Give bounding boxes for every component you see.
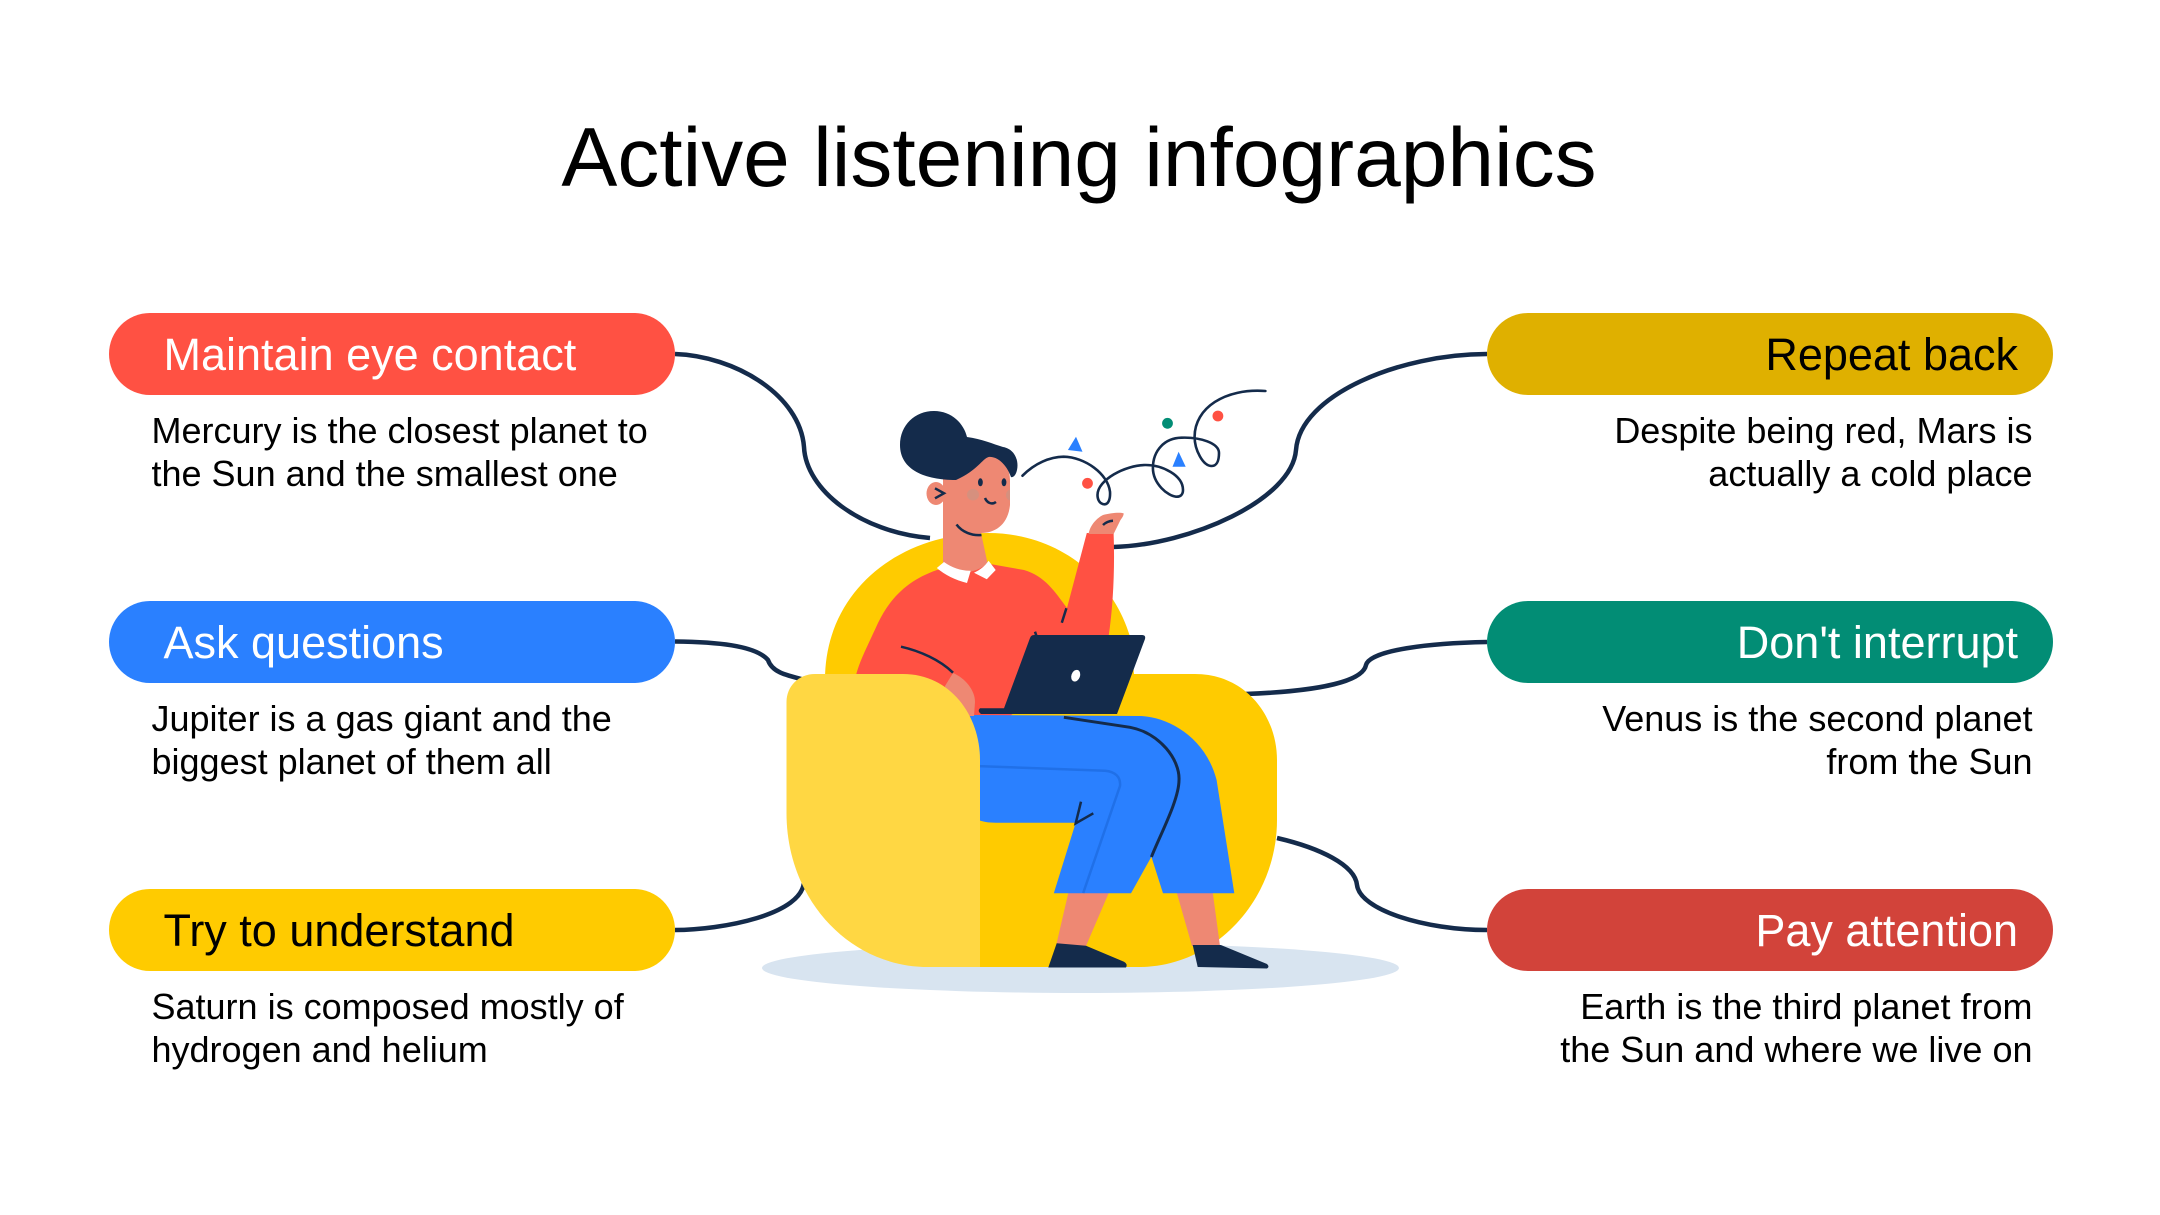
description	[152, 986, 624, 1070]
pill heading	[1486, 889, 2052, 971]
sweater lines	[1035, 608, 1066, 637]
panel: try to understand	[109, 889, 675, 1070]
description: Despite being red, Mars is	[1614, 410, 2032, 451]
title: Active listening infographics	[561, 110, 1597, 204]
description	[1614, 410, 2032, 494]
legs	[1056, 890, 1110, 946]
neck and face	[943, 456, 1010, 572]
floor shadow	[762, 943, 1399, 993]
description	[152, 698, 612, 782]
pill heading	[108, 601, 674, 683]
pill heading: Try to understand	[164, 905, 515, 956]
description	[1602, 698, 2032, 782]
description: Saturn is composed mostly of	[152, 986, 624, 1027]
raised hand	[1089, 513, 1124, 534]
description: from the Sun	[1826, 741, 2032, 782]
pill heading: Maintain eye contact	[164, 329, 576, 380]
description: Jupiter is a gas giant and the	[152, 698, 612, 739]
description: Venus is the second planet	[1602, 698, 2032, 739]
connector lines	[675, 354, 1487, 930]
trouser seam	[975, 766, 1120, 893]
hair	[900, 411, 1017, 480]
panel: repeat back	[1487, 313, 2053, 494]
sweater	[856, 533, 1114, 722]
pill heading: Pay attention	[1755, 905, 2018, 956]
pill heading: Repeat back	[1765, 329, 2018, 380]
description	[152, 410, 648, 494]
armchair left arm	[786, 674, 980, 967]
person	[856, 411, 1268, 968]
description: Mercury is the closest planet to	[152, 410, 648, 451]
armchair back and right arm	[825, 533, 1277, 967]
face details	[935, 478, 1010, 535]
collar	[937, 561, 996, 583]
laptop	[979, 635, 1145, 714]
sound waves squiggle	[1022, 391, 1265, 504]
pill heading	[1486, 313, 2052, 395]
description: actually a cold place	[1708, 453, 2032, 494]
shoes	[1048, 943, 1127, 968]
description: Earth is the third planet from	[1580, 986, 2032, 1027]
description: biggest planet of them all	[152, 741, 552, 782]
pill heading: Don't interrupt	[1737, 617, 2018, 668]
decorative triangles	[1068, 437, 1186, 467]
description	[1560, 986, 2032, 1070]
forearm	[945, 673, 975, 716]
panel: don't interrupt	[1487, 601, 2053, 782]
panel: ask questions	[109, 601, 675, 782]
pill heading	[108, 889, 674, 971]
pill heading: Ask questions	[164, 617, 444, 668]
decorative dots	[1082, 411, 1223, 489]
description: the Sun and where we live on	[1560, 1029, 2032, 1070]
panel: maintain eye contact	[109, 313, 675, 494]
description: the Sun and the smallest one	[152, 453, 618, 494]
trouser creases	[1064, 717, 1179, 857]
pill heading	[1486, 601, 2052, 683]
panel: pay attention	[1487, 889, 2053, 1070]
pill heading	[108, 313, 674, 395]
trousers	[970, 715, 1234, 893]
description: hydrogen and helium	[152, 1029, 488, 1070]
